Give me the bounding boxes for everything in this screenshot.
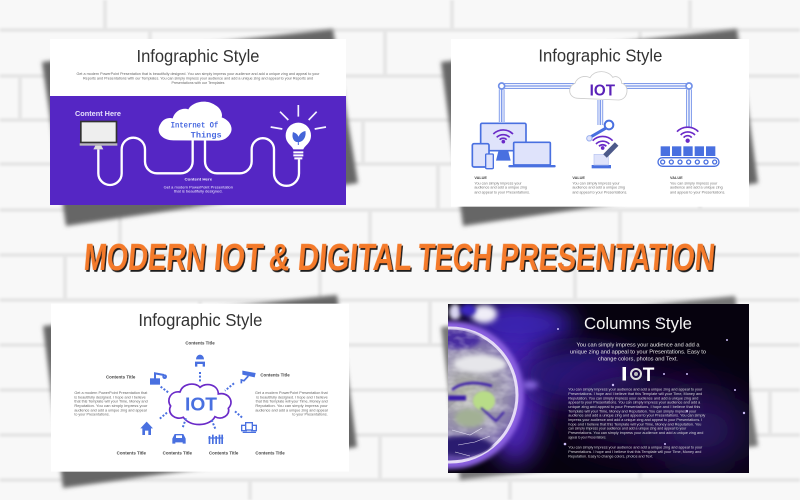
slide 4 body text: You can simply impress your audience and add a unique zing and appeal to your — [568, 388, 703, 392]
value text column 3: VALUE — [670, 176, 683, 180]
slide 4 body text: Presentations. You can simply impress your audience and add a unique zing and — [568, 431, 703, 435]
panel: IOT cloud hub slide — [51, 304, 349, 472]
contents title labels: Contents Title — [209, 450, 239, 455]
slide 4 body text: appeal to your Presentations. You can simply impress your audience and add a — [568, 401, 701, 405]
icon: computer, tablet, phone and laptop — [472, 123, 556, 169]
slide 1 intro text: Presentations with our Templates — [172, 80, 225, 85]
icon: robot arm — [151, 373, 166, 384]
icon: conveyor belt — [658, 127, 719, 166]
slide 4 body text: Presentations. I hope and I believe that this Template will your Time, Money and — [568, 392, 702, 396]
central IOT cloud: IOT — [185, 394, 218, 415]
icon: worker — [195, 355, 205, 367]
cloud with IOT — [570, 72, 627, 100]
title banner: IOT — [212, 237, 265, 279]
icon: wifi — [593, 136, 613, 149]
earth globe — [448, 318, 526, 472]
icon: fence — [208, 435, 223, 444]
slide 4 body text: can simply impress your audience and add a unique zing and appeal to your — [568, 427, 687, 431]
dotted connectors — [159, 372, 243, 430]
nebula glow — [449, 303, 750, 465]
slide 4 intro: You can simply impress your audience and add a — [576, 342, 700, 348]
bottom caption: Get a modern PowerPoint Presentation — [164, 185, 233, 189]
slide 4 body text — [568, 388, 705, 458]
panel: internet of things slide — [50, 39, 346, 205]
title banner — [82, 237, 717, 279]
slide 4 intro: unique zing and appeal to your Presentations. Easy to — [570, 350, 706, 356]
right paragraph: is beautifully designed. I hope and I believe — [256, 395, 328, 399]
slide 4 body text: Template will your Time, Money and Reputation. You can simply impress your — [568, 409, 697, 413]
value text column 3: and appeal to your Presentations. — [670, 190, 725, 194]
title banner: DIGITAL — [296, 237, 414, 279]
left paragraph: that this Template will your Time, Money and — [74, 400, 148, 404]
slide 4 intro — [570, 342, 706, 362]
value text column 1: You can simply impress your — [474, 181, 522, 185]
slide 3 title: Infographic Style — [138, 310, 262, 330]
central IOT cloud — [169, 384, 231, 425]
slide 4 title: Columns Style — [584, 314, 692, 333]
slide 1 intro text: Get a modern PowerPoint Presentation that is beautifully designed. You can simply impress your audience and add a unique zing and appeal to your — [76, 71, 320, 76]
icon: security camera — [241, 371, 256, 383]
title banner: MODERN — [82, 237, 208, 279]
right paragraph: Get a modern PowerPoint Presentation that — [255, 391, 329, 395]
value text column 3: audience and add a unique zing — [670, 186, 723, 190]
value text column 2: and appeal to your Presentations. — [572, 190, 627, 194]
slide 2 title: Infographic Style — [538, 46, 662, 66]
bottom caption — [164, 177, 233, 194]
icon: wifi — [493, 130, 513, 143]
cloud with IOT: IOT — [590, 83, 615, 100]
slide 4 body text: Presentations. I hope and I believe that this Template will your Time, Money and — [568, 450, 701, 454]
slide 1 diagram — [75, 102, 326, 194]
title banner: PRESENTATION — [498, 237, 717, 279]
pipes — [499, 83, 692, 127]
icon: monitors — [242, 423, 256, 432]
contents title labels: Contents Title — [117, 450, 147, 455]
shadow behind bottom-left slide — [43, 295, 357, 488]
contents title labels — [106, 340, 290, 455]
slide 1 intro text — [76, 71, 320, 85]
content here label: Content Here — [75, 111, 121, 118]
right paragraph — [255, 391, 329, 417]
value text column 1: and appeal to your Presentations. — [474, 190, 530, 194]
icon: robot arm — [587, 121, 617, 168]
value text column 3: You can simply impress your — [670, 181, 718, 185]
title banner: TECH — [416, 237, 494, 279]
cable lines — [98, 138, 299, 186]
panel: IOT connected devices slide — [451, 39, 749, 207]
contents title labels: Contents Title — [185, 340, 215, 345]
title banner: & — [267, 237, 292, 279]
IOT logo: T — [643, 365, 655, 386]
icon: car — [172, 434, 186, 444]
slide 4 body text: unique zing and appeal to your Presentations. I hope and I believe that this — [568, 405, 700, 409]
icon: cloud: Internet Of — [171, 121, 218, 131]
bottom caption: Content Here — [184, 177, 213, 182]
value text column 2: VALUE — [572, 176, 585, 180]
left paragraph: to your Presentations. — [74, 413, 110, 417]
shadow behind bottom-right slide — [441, 296, 758, 480]
bottom caption: that is beautifully designed. — [174, 190, 223, 194]
slide 1 title: Infographic Style — [136, 46, 260, 66]
right paragraph: Reputation. You can simply impress your — [255, 404, 328, 408]
left paragraph: audience and add a unique zing and appeal — [74, 408, 147, 412]
slide 4 body text: appeal to your Presentations. — [568, 436, 606, 440]
right paragraph: that this Template will your Time, Money and — [256, 400, 328, 404]
value text column 1: VALUE — [474, 176, 487, 180]
left paragraph: Get a modern PowerPoint Presentation that — [74, 391, 148, 395]
value text column 1: audience and add a unique zing — [474, 186, 527, 190]
contents title labels: Contents Title — [255, 450, 285, 455]
contents title labels: Contents Title — [163, 450, 193, 455]
IOT logo — [622, 367, 654, 381]
value text column 2: You can simply impress your — [572, 181, 620, 185]
right paragraph: to your Presentations. — [292, 413, 328, 417]
value text column 2 — [572, 176, 627, 194]
value text column 3 — [670, 176, 725, 194]
icon: wifi — [677, 127, 698, 142]
icon: computer monitor — [80, 121, 117, 149]
slide 1 intro text: Reports and Presentations with our Templates. You can simply impress your audience and add a unique zing and appeal to your Reports and — [83, 76, 313, 80]
slide 4 body text: You can simply impress your audience and add a unique zing and appeal to your — [568, 446, 703, 450]
slide 4 intro: change colors, photos and Text. — [598, 356, 678, 362]
shadow behind top-left slide — [42, 29, 358, 226]
stars — [557, 319, 745, 445]
slide 4 body text: hope and I believe that this Template will your Time, Money and Reputation. You — [568, 422, 701, 426]
slide 4 body text: Reputation. Easy to change colors, photos and Text. — [568, 454, 653, 458]
left paragraph: Reputation. You can simply impress your — [74, 404, 148, 408]
panel: columns style space slide — [448, 304, 749, 473]
slide 4 body text: audience and add a unique zing and appeal to your Presentations. You can simply — [568, 414, 705, 418]
slide 4 body text: impress your audience and add a unique zing and appeal to your Presentations. I — [568, 418, 702, 422]
right paragraph: audience and add a unique zing and appeal — [255, 408, 328, 412]
slide 4 body text: Reputation. You can simply impress your audience and add a unique zing and — [568, 396, 698, 400]
left paragraph — [74, 391, 148, 417]
value text column 1 — [474, 176, 530, 194]
contents title labels: Contents Title — [260, 372, 290, 377]
left paragraph: is beautifully designed. I hope and I believe — [74, 395, 146, 399]
value text column 2: audience and add a unique zing — [572, 186, 625, 190]
contents title labels: Contents Title — [106, 375, 136, 380]
icon: cloud — [159, 102, 232, 141]
icon: light bulb — [271, 105, 326, 158]
shadow behind top-right slide — [441, 29, 758, 226]
icon: cloud: Things — [191, 130, 222, 140]
icon: home — [140, 422, 153, 435]
